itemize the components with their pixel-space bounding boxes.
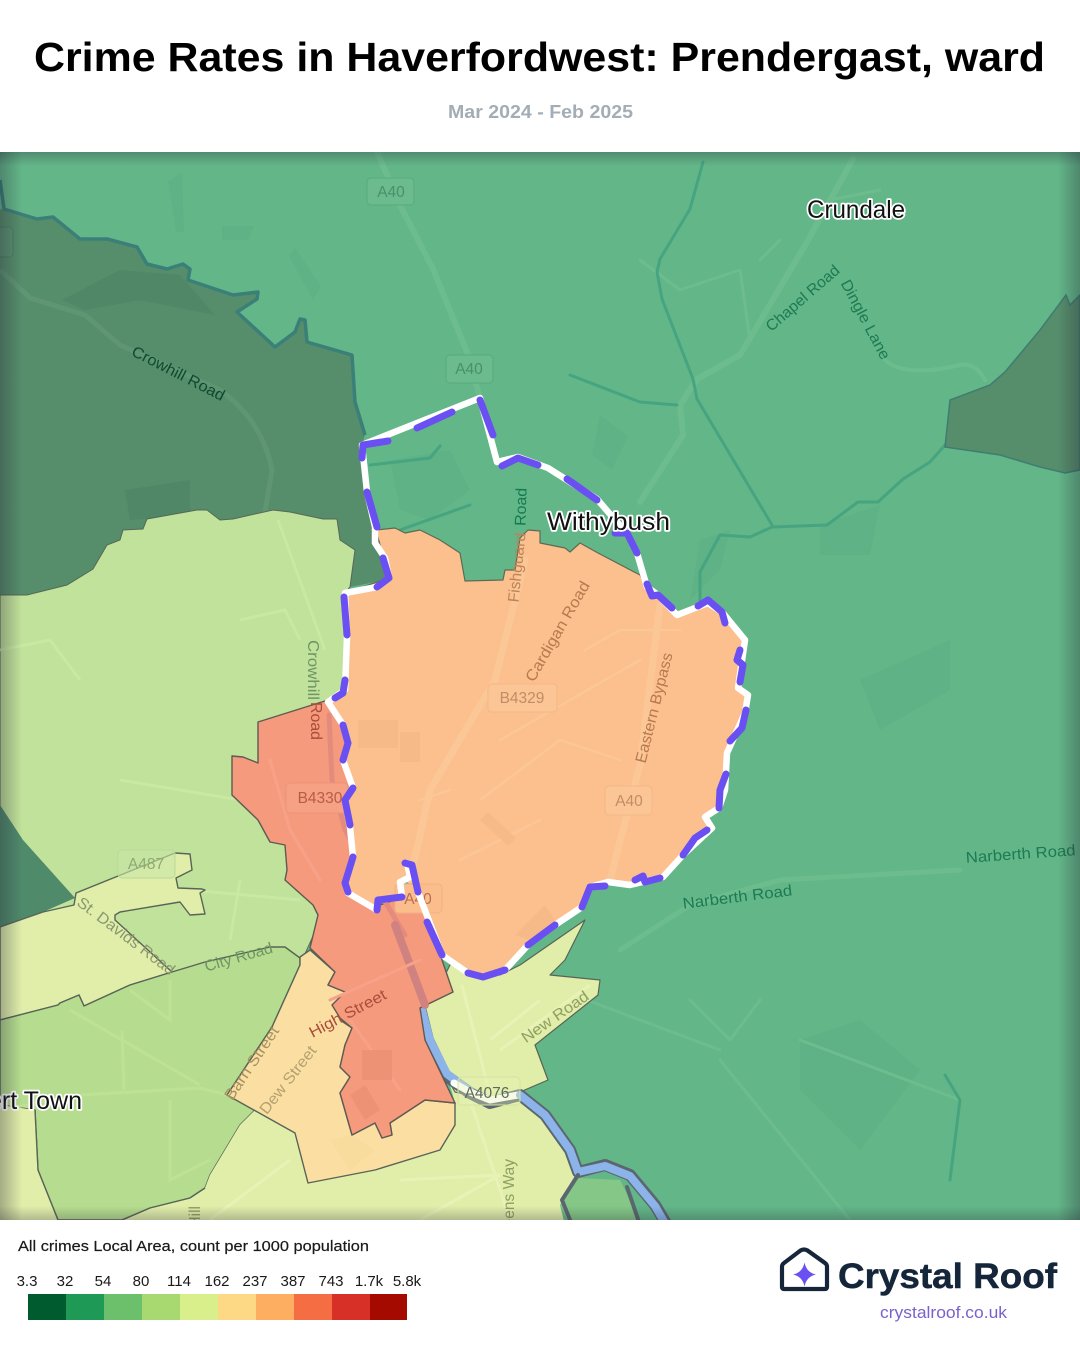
shield: A40 south: A40 <box>404 891 432 908</box>
road labels <box>73 262 1076 1248</box>
choropleth area: main green <box>168 172 950 1150</box>
choropleth area: salmon <box>232 700 455 1138</box>
shield: B4330 <box>286 783 348 813</box>
dark area boundary stream <box>0 180 365 435</box>
shield: A40 bypass <box>605 786 652 815</box>
label: Dingle Lane: Dingle Lane <box>837 277 893 363</box>
label: Eastern Bypass: Eastern Bypass <box>633 651 677 765</box>
legend values: 387 <box>280 1273 306 1290</box>
legend values: 32 <box>57 1273 73 1290</box>
label: Crowhill Road north-west: Crowhill Road <box>129 343 227 405</box>
label: Narberth Road west: Narberth Road <box>682 882 793 913</box>
legend <box>17 1239 422 1320</box>
legend values: 162 <box>204 1273 230 1290</box>
label: City Road: City Road <box>203 940 275 975</box>
choropleth area: yellow-green south <box>0 1085 578 1225</box>
label: Fishguard: Fishguard <box>505 532 530 603</box>
choropleth area: mid green south-west <box>0 947 300 1220</box>
ward boundary: white line <box>328 398 748 977</box>
logo: Crystal Roof <box>782 1250 1057 1322</box>
river <box>420 1008 670 1232</box>
label: High Street: High Street <box>306 986 390 1041</box>
legend values: 114 <box>167 1273 191 1290</box>
shield: west edge <box>0 227 13 257</box>
ward boundary: purple dashes <box>335 400 746 977</box>
place label: Crundale: Crundale <box>807 196 905 224</box>
shield: A40 bypass: A40 <box>615 793 643 810</box>
legend values <box>17 1273 422 1290</box>
shield: A40 <box>446 355 493 383</box>
label: St. Davids Road: St. Davids Road <box>73 894 178 979</box>
label: Hill: Hill <box>187 1206 204 1228</box>
light green streets <box>0 520 325 940</box>
shield: B4329 <box>488 684 557 712</box>
ward building shading <box>500 834 512 840</box>
wordmark: Crystal Roof <box>838 1257 1057 1296</box>
dark area details <box>15 281 274 512</box>
title: Crime Rates in Haverfordwest: Prendergast, ward <box>34 34 1045 80</box>
label: Chapel Road: Chapel Road <box>763 262 843 335</box>
mid green streets <box>18 1093 228 1108</box>
legend values: 3.3 <box>17 1273 37 1290</box>
legend values: 743 <box>318 1273 344 1290</box>
road shields <box>0 178 652 1105</box>
label: New Road: New Road <box>519 988 592 1047</box>
shield: A487 <box>118 850 175 878</box>
label: Queens Way: Queens Way <box>501 1159 518 1248</box>
legend values: 5.8k <box>393 1273 422 1290</box>
shield: A40 north <box>367 178 414 205</box>
shield: A4076: A4076 <box>465 1085 509 1102</box>
streams <box>370 162 960 1180</box>
label: Crowhill (vertical): Crowhill <box>304 640 321 700</box>
legend values: 1.7k <box>355 1273 384 1290</box>
legend colour bar <box>28 1294 407 1320</box>
choropleth area: ward peach <box>328 528 748 977</box>
label: Dew Street: Dew Street <box>257 1042 321 1118</box>
choropleth area: dark green north-west <box>0 209 390 595</box>
choropleth area: yellow-green St Davids <box>0 853 205 1020</box>
shield: A4076 <box>458 1077 520 1105</box>
label: Cardigan Road: Cardigan Road <box>522 579 594 685</box>
label: Barn Street: Barn Street <box>221 1023 283 1103</box>
map vignette <box>0 152 1080 1220</box>
south streets <box>210 1100 510 1220</box>
label: Road (vertical): Road <box>307 702 324 740</box>
shield: B4330: B4330 <box>298 790 343 807</box>
ward roads <box>407 880 412 884</box>
label: Road (Fishguard): Road <box>512 488 531 526</box>
choropleth area: light green west <box>0 510 356 972</box>
legend title: All crimes Local Area, count per 1000 population <box>18 1239 369 1255</box>
choropleth area: dark green south-west wedge <box>0 805 75 927</box>
salmon rail and streets <box>270 715 425 1120</box>
legend values: 237 <box>242 1273 268 1290</box>
roads on green <box>377 152 985 1220</box>
shield: A487: A487 <box>128 856 164 873</box>
place label: Withybush: Withybush <box>547 508 670 536</box>
legend values: 54 <box>95 1273 111 1290</box>
label: Narberth Road east: Narberth Road <box>965 842 1076 867</box>
choropleth area: dark green east <box>945 295 1080 473</box>
website url: crystalroof.co.uk <box>880 1304 1008 1322</box>
choropleth area: light green south pocket <box>560 1178 636 1220</box>
shield: B4329: B4329 <box>500 690 544 707</box>
shield: A40 south <box>395 884 442 913</box>
shield: A40 north: A40 <box>377 184 405 201</box>
legend values: 80 <box>133 1273 149 1290</box>
shield: A40: A40 <box>455 361 483 378</box>
choropleth area: yellow-green New Road <box>420 920 600 1102</box>
icon: house with star <box>782 1250 827 1289</box>
subtitle: date range: Mar 2024 - Feb 2025 <box>448 101 633 122</box>
choropleth area: cream <box>227 950 455 1183</box>
